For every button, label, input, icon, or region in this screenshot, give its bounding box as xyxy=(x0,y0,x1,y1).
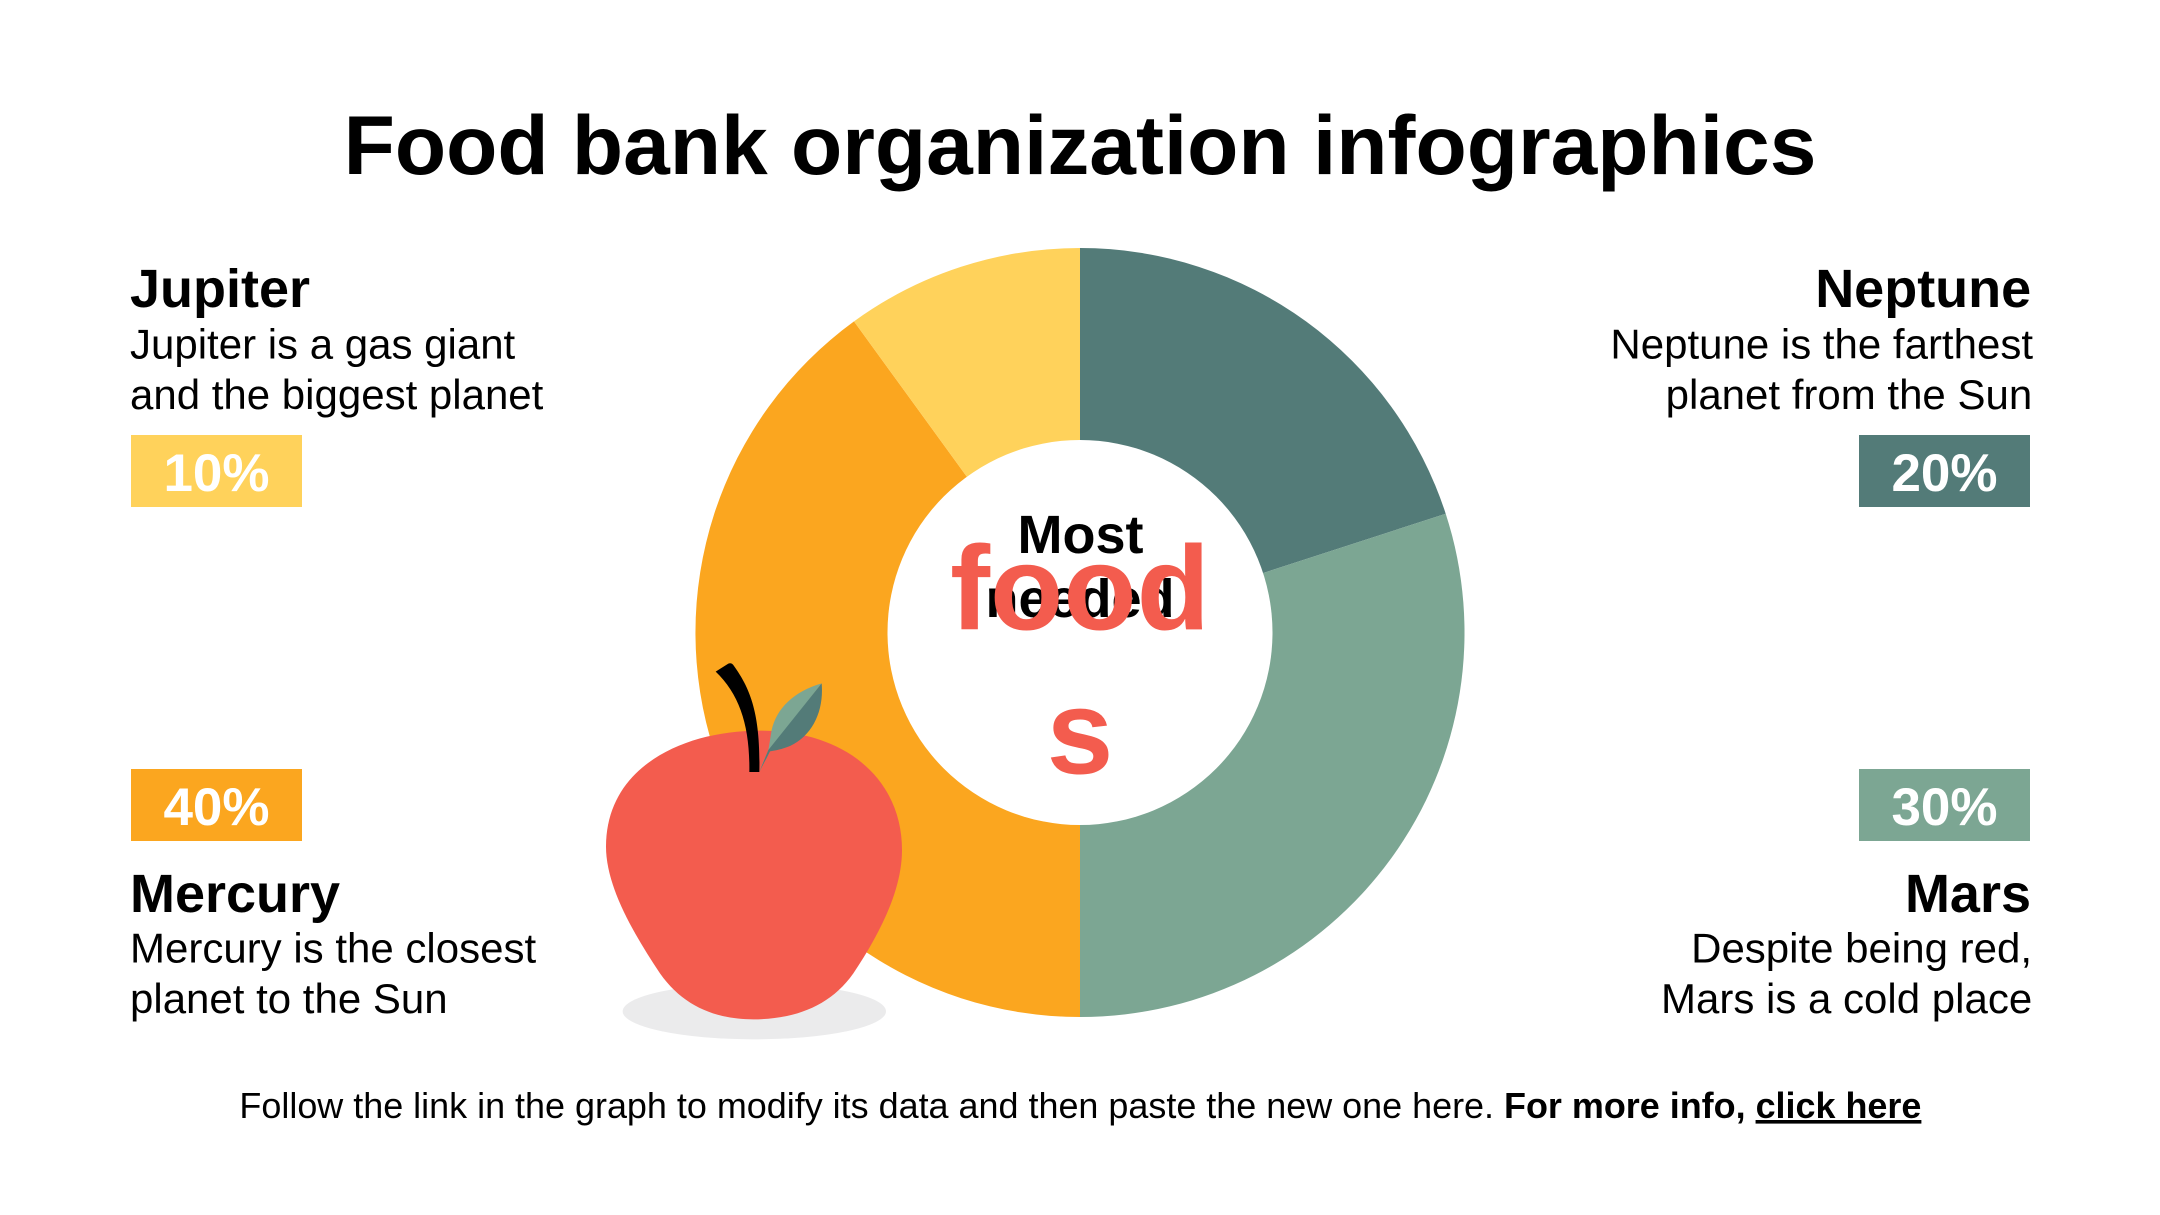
text: Mars description: Mars is a cold place xyxy=(1661,975,2032,1022)
badge: 20% xyxy=(1859,435,2030,507)
text: Jupiter description: and the biggest planet xyxy=(130,371,544,418)
panel: Neptune xyxy=(1610,259,2033,507)
center label: most needed: needed xyxy=(985,569,1175,629)
heading: Jupiter: Jupiter xyxy=(130,259,310,319)
apple leaf xyxy=(759,683,822,772)
heading: Mercury: Mercury xyxy=(130,864,340,924)
icon: apple xyxy=(606,663,902,1039)
apple stem xyxy=(716,663,759,772)
text: Neptune description: Neptune is the farthest xyxy=(1610,320,2033,367)
badge: 20%: 20% xyxy=(1891,444,1998,503)
center label: most needed: Most xyxy=(1018,505,1144,565)
slice: Mercury 40% xyxy=(695,321,1080,1017)
slice: Mars 30% xyxy=(1080,514,1465,1017)
footer note: Follow the link in the graph to modify its data and then paste the new one here. For more info, click here xyxy=(239,1085,1921,1126)
donut hole xyxy=(888,440,1272,825)
slice: Neptune 20% xyxy=(1080,248,1446,632)
panel: Mars xyxy=(1661,769,2032,1022)
center label: foods: food xyxy=(950,522,1210,656)
panel: Mercury xyxy=(130,769,536,1022)
text: Mercury description: planet to the Sun xyxy=(130,975,448,1022)
badge: 30%: 30% xyxy=(1891,778,1998,837)
text: Mercury description: Mercury is the closest xyxy=(130,924,536,971)
heading: Neptune: Neptune xyxy=(1815,259,2031,319)
badge: 40%: 40% xyxy=(163,778,270,837)
panel: Jupiter xyxy=(130,259,544,507)
text: Mars description: Despite being red, xyxy=(1691,924,2032,971)
text: Neptune description: planet from the Sun xyxy=(1666,371,2032,418)
badge: 10%: 10% xyxy=(163,444,270,503)
badge: 30% xyxy=(1859,769,2030,841)
apple body xyxy=(606,731,902,1019)
title: Food bank organization infographics xyxy=(344,98,1816,192)
donut chart xyxy=(695,248,1465,1017)
text: Jupiter description: Jupiter is a gas giant xyxy=(130,320,516,367)
apple shadow xyxy=(623,983,886,1039)
badge: 10% xyxy=(131,435,302,507)
badge: 40% xyxy=(131,769,302,841)
center label: foods: s xyxy=(1047,666,1113,800)
slice: Jupiter 10% xyxy=(854,248,1080,632)
heading: Mars: Mars xyxy=(1905,864,2031,924)
